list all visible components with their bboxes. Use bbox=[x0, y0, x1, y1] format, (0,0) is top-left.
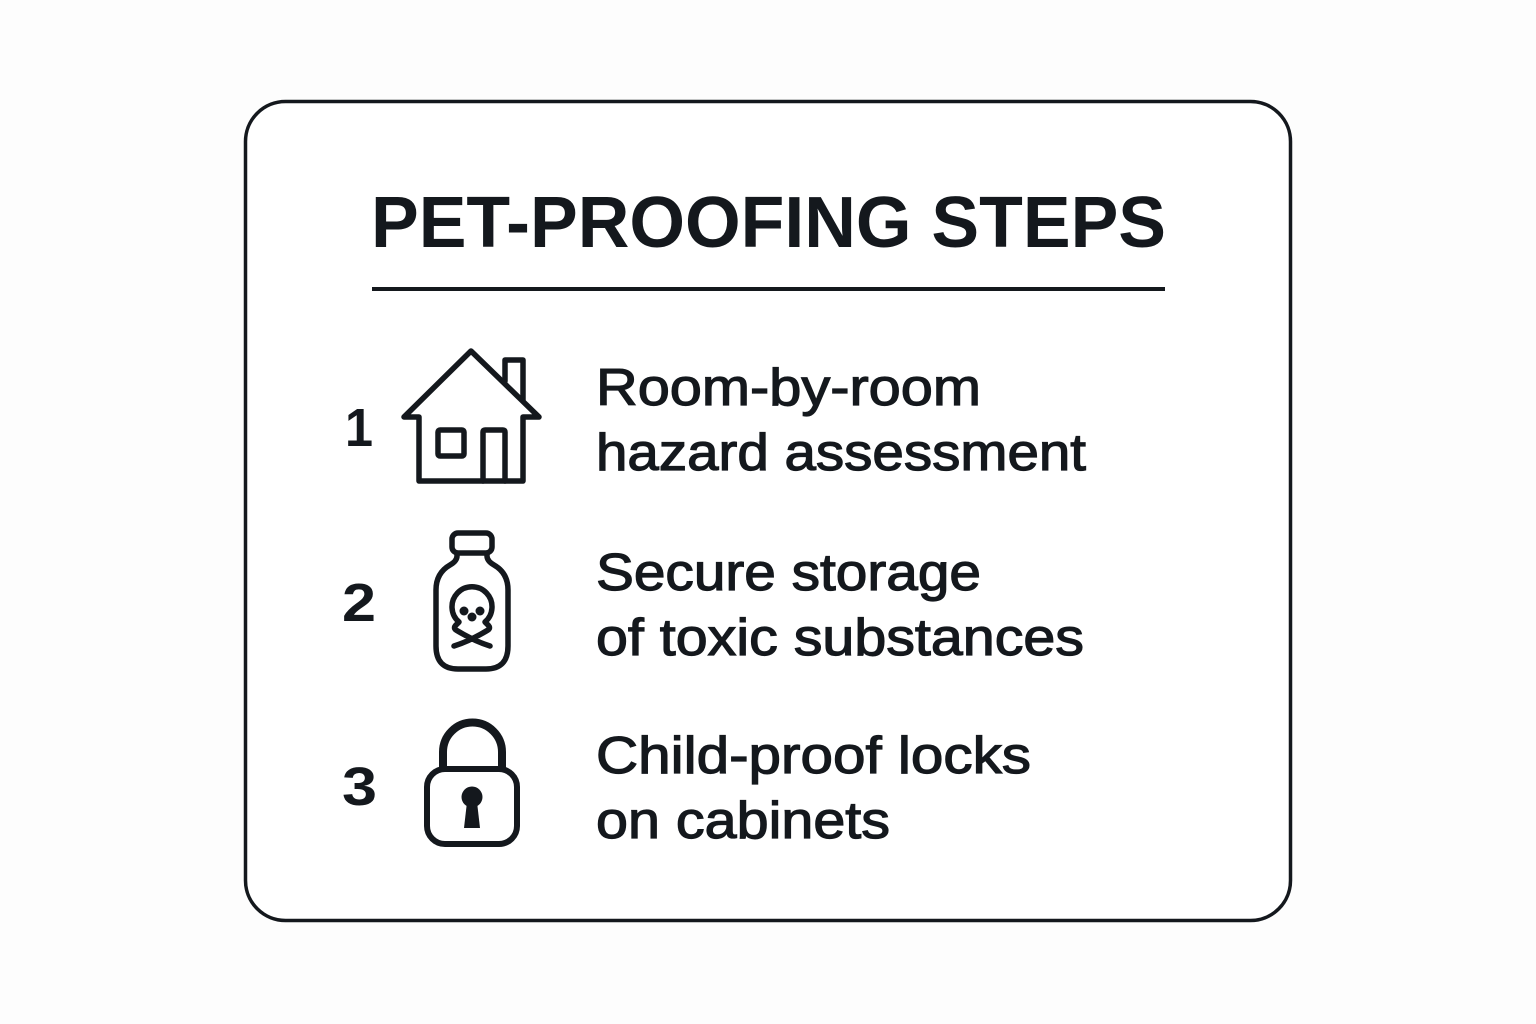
step 2 text: Secure storage bbox=[596, 544, 981, 602]
step 1 text: Room-by-room bbox=[596, 359, 981, 417]
step 1: hazard assessment bbox=[596, 424, 1087, 482]
step 2: of toxic substances bbox=[596, 609, 1084, 667]
step 2 number: 2 bbox=[342, 573, 376, 633]
step 1 number: 1 bbox=[345, 398, 373, 458]
step 1 bbox=[345, 351, 1087, 482]
step 3 text: Child-proof locks bbox=[596, 727, 1031, 785]
panel: pet-proofing card bbox=[246, 102, 1290, 920]
step 3 number: 3 bbox=[342, 757, 377, 817]
step 2 bbox=[342, 533, 1084, 669]
title: PET-PROOFING STEPS bbox=[371, 183, 1166, 263]
step 3 bbox=[342, 723, 1031, 850]
icon: poison bottle bbox=[436, 533, 508, 669]
icon: padlock bbox=[427, 723, 517, 844]
icon: house bbox=[404, 351, 539, 481]
step 3: on cabinets bbox=[596, 792, 890, 850]
